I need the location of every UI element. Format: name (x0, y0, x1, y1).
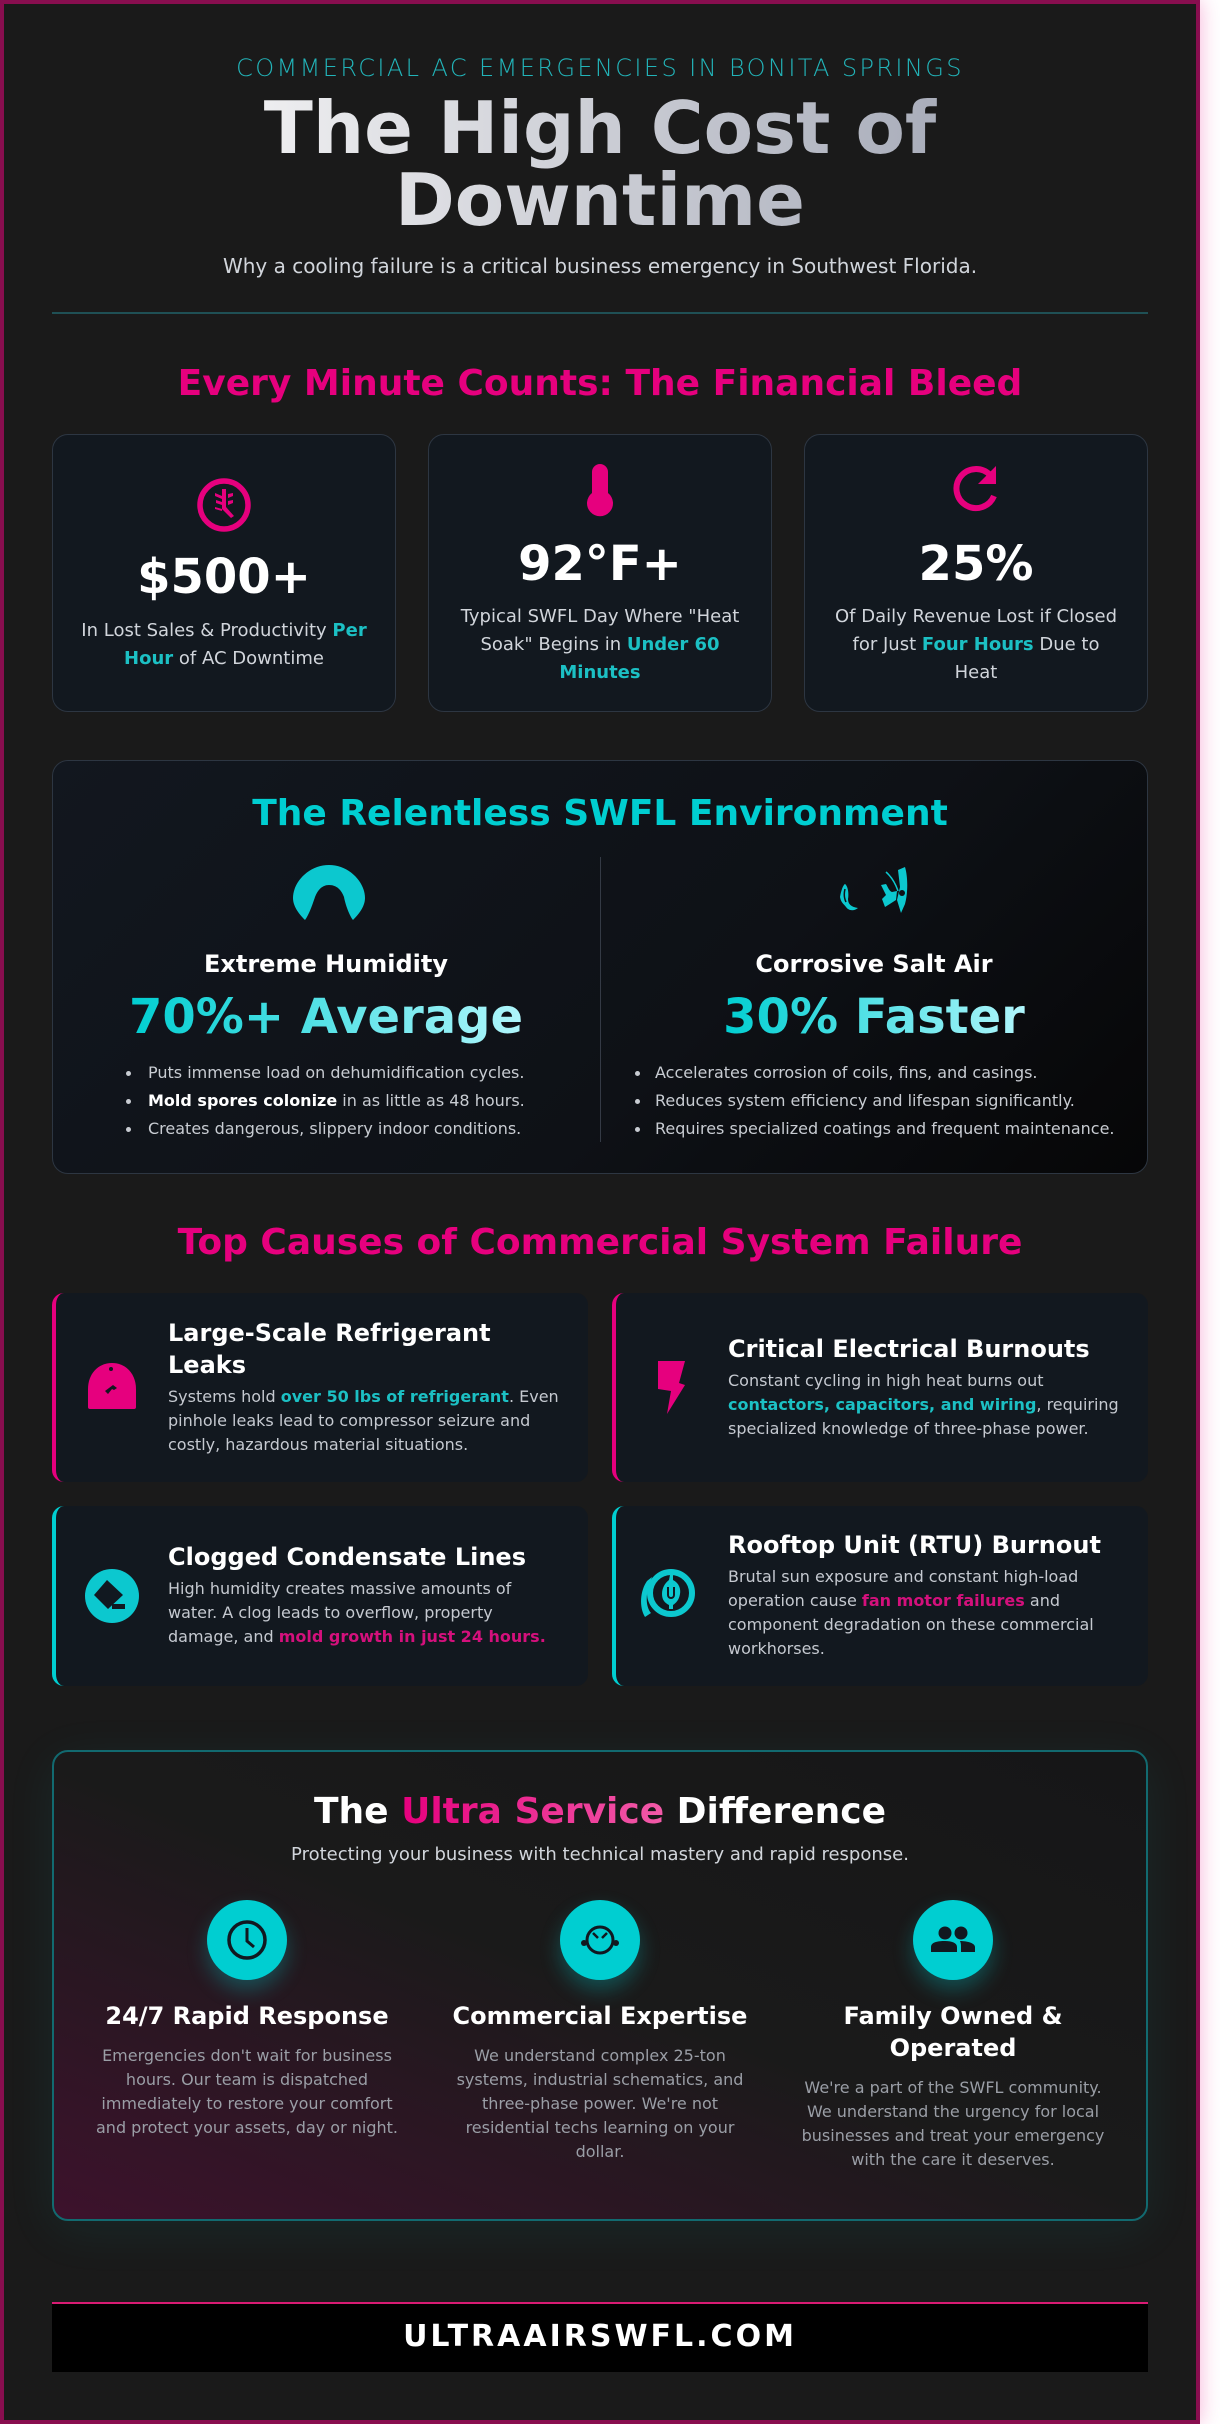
panel: SWFL environment (52, 760, 1148, 1174)
cause text: High humidity creates massive amounts of (168, 1579, 511, 1598)
stat description: Typical SWFL Day Where "Heat (461, 606, 739, 627)
header (52, 50, 1148, 314)
stat description: Of Daily Revenue Lost if Closed (835, 606, 1117, 627)
cause text: workhorses. (728, 1639, 825, 1658)
cause title: Critical Electrical Burnouts (728, 1335, 1090, 1363)
cause text: component degradation on these commercial (728, 1615, 1094, 1634)
tagline: Why a cooling failure is a critical business emergency in Southwest Florida. (223, 254, 977, 278)
cause title: Rooftop Unit (RTU) Burnout (728, 1531, 1101, 1559)
divider (600, 857, 601, 1142)
footer (52, 2302, 1148, 2372)
icon: clock (207, 1900, 287, 1980)
icon: refrigerant tank (88, 1363, 136, 1409)
cause text (728, 1567, 1094, 1658)
bullet list: Requires specialized coatings and frequent maintenance. (655, 1119, 1114, 1138)
cause text: pinhole leaks lead to compressor seizure and (168, 1411, 530, 1430)
icon: people (913, 1900, 993, 1980)
icon: salt air wind (840, 867, 908, 913)
cause text: water. A clog leads to overflow, property (168, 1603, 493, 1622)
panel: electrical burnouts (612, 1293, 1148, 1482)
cause text: operation cause fan motor failures and (728, 1591, 1060, 1610)
cause text: contactors, capacitors, and wiring, requiring (728, 1395, 1119, 1414)
panel: RTU burnout (612, 1506, 1148, 1686)
cause text: specialized knowledge of three-phase power. (728, 1419, 1089, 1438)
cause title: Large-Scale Refrigerant (168, 1319, 491, 1347)
stat description: for Just Four Hours Due to (853, 634, 1099, 655)
main title: The High Cost of (264, 86, 936, 170)
item text: Emergencies don't wait for business (102, 2046, 392, 2065)
stat description: In Lost Sales & Productivity Per (81, 620, 367, 641)
cause text: Brutal sun exposure and constant high-load (728, 1567, 1078, 1586)
icon: lightning bolt (658, 1361, 685, 1414)
bullet list (126, 1063, 525, 1138)
heading: environment: The Relentless SWFL Environment (252, 793, 948, 834)
panel: stat heat soak (428, 434, 772, 712)
cause text: costly, hazardous material situations. (168, 1435, 468, 1454)
item title: Family Owned & (843, 2002, 1063, 2030)
stat description (460, 606, 739, 683)
item title: Commercial Expertise (453, 2002, 747, 2030)
main title: Downtime (395, 158, 805, 242)
panel: Ultra Service difference (52, 1750, 1148, 2221)
icon: thermometer (587, 464, 613, 516)
item text (96, 2046, 398, 2137)
sub-heading: Corrosive Salt Air (755, 950, 993, 978)
cause text: Constant cycling in high heat burns out (728, 1371, 1044, 1390)
item text: with the care it deserves. (851, 2150, 1055, 2169)
bullet list: Puts immense load on dehumidification cycles. (148, 1063, 524, 1082)
bullet list: Mold spores colonize in as little as 48 hours. (148, 1091, 525, 1110)
bullet list: Creates dangerous, slippery indoor conditions. (148, 1119, 521, 1138)
item text: We understand complex 25-ton (474, 2046, 726, 2065)
item title: Operated (890, 2034, 1016, 2062)
item text: residential techs learning on your (466, 2118, 734, 2137)
stat value: 25% (919, 536, 1033, 592)
stat value: 92°F+ (518, 536, 682, 592)
cause title (168, 1319, 491, 1379)
icon: clogged drain (85, 1569, 139, 1623)
item title: 24/7 Rapid Response (105, 2002, 389, 2030)
cause text (168, 1387, 559, 1454)
item text: hours. Our team is dispatched (126, 2070, 368, 2089)
stat value: $500+ (137, 549, 311, 605)
heading: financial bleed: Every Minute Counts: The Financial Bleed (178, 363, 1022, 404)
stat description: Hour of AC Downtime (124, 648, 324, 669)
panel: stat revenue lost (804, 434, 1148, 712)
service subtitle: Protecting your business with technical mastery and rapid response. (291, 1844, 909, 1865)
item text: three-phase power. We're not (482, 2094, 718, 2113)
stat description (81, 620, 367, 669)
item text (457, 2046, 743, 2161)
cause text: Systems hold over 50 lbs of refrigerant. Even (168, 1387, 559, 1406)
item text: systems, industrial schematics, and (457, 2070, 743, 2089)
icon: rooftop fan (641, 1569, 695, 1617)
column: rapid response (96, 1900, 398, 2137)
panel: refrigerant leaks (52, 1293, 588, 1482)
item title (843, 2002, 1063, 2062)
stat: 30% Faster (723, 989, 1025, 1045)
cause text: damage, and mold growth in just 24 hours. (168, 1627, 546, 1646)
heading: service difference: The Ultra Service Difference (314, 1791, 886, 1832)
icon: rotate arrow (953, 466, 997, 512)
column: commercial expertise (453, 1900, 747, 2161)
bullet list (635, 1063, 1114, 1138)
column: family owned (802, 1900, 1104, 2169)
cause text (728, 1371, 1119, 1438)
stat description: Heat (955, 662, 997, 683)
bullet list: Accelerates corrosion of coils, fins, and casings. (655, 1063, 1038, 1082)
item text: dollar. (576, 2142, 624, 2161)
column: salt air (635, 867, 1114, 1138)
item text: We understand the urgency for local (807, 2102, 1099, 2121)
website: ULTRAAIRSWFL.COM (403, 2319, 797, 2354)
stat description (835, 606, 1117, 683)
stat: 70%+ Average (129, 989, 523, 1045)
icon: money ring (197, 478, 251, 532)
cause title: Leaks (168, 1351, 246, 1379)
item text (802, 2078, 1104, 2169)
stat description: Minutes (559, 662, 641, 683)
column: humidity (126, 865, 525, 1138)
icon: gauge face (560, 1900, 640, 1980)
cause title: Clogged Condensate Lines (168, 1543, 526, 1571)
item text: businesses and treat your emergency (802, 2126, 1104, 2145)
main title (260, 92, 940, 236)
panel: condensate lines (52, 1506, 588, 1686)
item text: immediately to restore your comfort (101, 2094, 393, 2113)
eyebrow: COMMERCIAL AC EMERGENCIES IN BONITA SPRINGS (236, 54, 964, 82)
panel: stat downtime cost (52, 434, 396, 712)
heading: top causes: Top Causes of Commercial System Failure (178, 1222, 1022, 1263)
cause text (168, 1579, 546, 1646)
stat description: Soak" Begins in Under 60 (480, 634, 720, 655)
sub-heading: Extreme Humidity (204, 950, 448, 978)
bullet list: Reduces system efficiency and lifespan significantly. (655, 1091, 1075, 1110)
icon: humidity arch (293, 865, 365, 920)
item text: We're a part of the SWFL community. (804, 2078, 1102, 2097)
item text: and protect your assets, day or night. (96, 2118, 398, 2137)
